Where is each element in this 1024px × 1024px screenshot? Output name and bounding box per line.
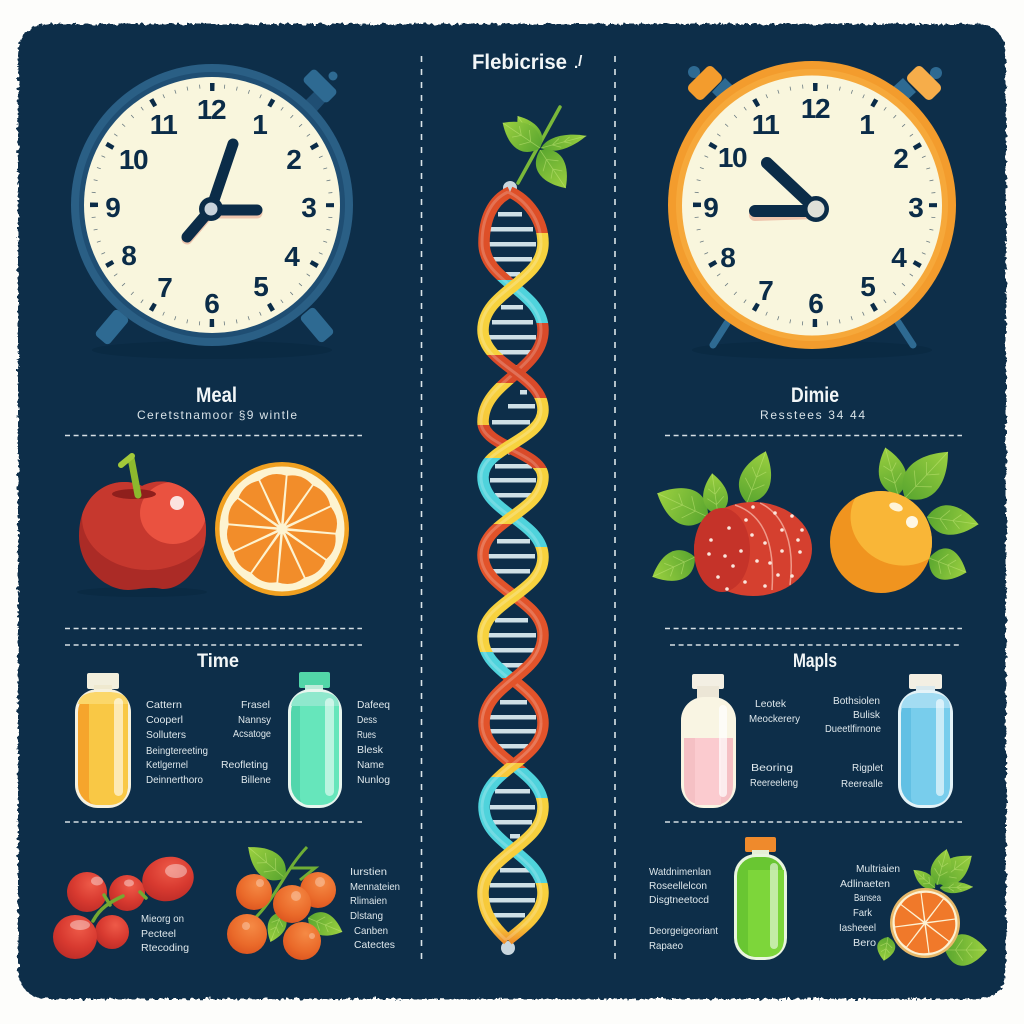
left clock feet [94,306,335,346]
column dividers [422,56,615,964]
text: green bottle left labels: Disgtneetocd [649,894,709,906]
text: mint bottle labels: Nunlog [357,774,390,786]
text: middle labels: Frasel [241,699,270,711]
center title: / [578,53,583,70]
right clock bells [686,64,943,102]
text: mint bottle labels: Blesk [357,744,384,756]
icon: orange slice [215,462,349,596]
icon: strawberry with leaves [646,446,812,596]
dna helix [481,107,588,955]
left clock numerals: 4 [284,241,300,272]
text: yellow bottle labels: Cattern [146,699,182,711]
text: mint bottle labels: Rues [357,729,376,741]
text: pink bottle labels [749,698,801,789]
text: orange slice labels: Adlinaeten [840,878,890,890]
text: tomato labels: Rlimaien [350,895,387,907]
text: middle labels: Nannsy [238,714,272,726]
right clock numerals: 6 [808,288,824,319]
text: yellow bottle labels: Solluters [146,729,186,741]
heading: Maps: Mapls [793,651,837,672]
right clock numerals: 7 [758,275,774,306]
text: yellow bottle labels: Ketlgernel [146,759,188,771]
right clock numerals: 11 [752,109,779,140]
text: cherry labels: Rtecoding [141,942,189,954]
dna rungs [487,212,536,918]
left clock numerals: 6 [204,288,220,319]
center title: Flebicrise [472,51,567,74]
text: tomato labels: Dlstang [350,910,383,922]
right clock numerals: 2 [893,143,909,174]
right clock numerals: 3 [908,192,924,223]
left clock hands [187,144,257,239]
text: orange slice labels: Fark [853,907,873,919]
text: yellow bottle labels: Cooperl [146,714,183,726]
heading: Meal: Ceretstnamoor §9 wintle [137,408,297,422]
text: tomato labels [350,866,400,951]
text: orange slice labels [839,863,900,949]
text: blue bottle labels: Rigplet [852,762,883,774]
section dividers [65,436,962,822]
left clock numerals: 5 [253,271,269,302]
dna end caps [501,181,517,955]
text: middle labels: Acsatoge [233,728,271,740]
bottle: yellow [75,673,131,808]
right clock rim [668,61,956,349]
text: tomato labels: Iurstien [350,866,387,878]
left clock bell [302,68,338,111]
left clock [71,64,353,359]
left clock numerals: 3 [301,192,317,223]
right clock numerals: 5 [860,271,876,302]
heading: Dimie [760,384,865,422]
left clock numerals [105,94,317,319]
right clock numerals: 8 [720,242,736,273]
icon: orange with leaves [830,440,981,593]
text: mint bottle labels: Name [357,759,384,771]
left clock numerals: 1 [252,109,268,140]
icon: leaf sprig [495,107,588,196]
text: pink bottle labels: Meockerery [749,713,801,725]
heading: Dimie: Dimie [791,384,839,407]
text: blue bottle labels [825,695,883,790]
text: green bottle left labels: Rapaeo [649,940,683,952]
text: green bottle left labels: Deorgeigeoriant [649,925,718,937]
text: green bottle left labels [649,866,718,952]
heading: Meal: Meal [196,384,237,407]
text: pink bottle labels: Leotek [755,698,787,710]
text: mint bottle labels: Dafeeq [357,699,390,711]
dna back strands [481,192,543,940]
text: orange slice labels: Bansea [854,892,881,904]
left clock numerals: 8 [121,240,137,271]
text: orange slice labels: Iasheeel [839,922,876,934]
text: tomato labels: Canben [354,925,388,937]
text: cherry labels: Pecteel [141,928,176,940]
left clock numerals: 7 [157,272,173,303]
text: middle labels: Billene [241,774,271,786]
text: mint bottle labels: Dess [357,714,377,726]
text: orange slice labels: Multriaien [856,863,900,875]
right clock numerals: 12 [801,93,830,124]
right clock feet [713,322,913,345]
left clock rim [71,64,353,346]
text: blue bottle labels: Bulisk [853,709,881,721]
right clock numerals: 4 [891,242,907,273]
text: yellow bottle labels: Deinnerthoro [146,774,203,786]
text: yellow bottle labels [146,699,208,786]
text: blue bottle labels: Dueetlfirnone [825,723,881,735]
icon: small orange slice with leaves [875,846,987,966]
icon: cherries [53,851,199,959]
text: green bottle left labels: Watdnimenlan [649,866,711,878]
text: cherry labels: Mieorg on [141,913,184,925]
bottle: blue [898,674,953,808]
right clock hands [755,163,829,222]
text: blue bottle labels: Bothsiolen [833,695,880,707]
icon: tomatoes on vine [227,837,347,960]
text: cherry labels [141,913,189,954]
text: tomato labels: Catectes [354,939,395,951]
right clock numerals: 10 [718,142,747,173]
right clock numerals [703,93,924,319]
text: green bottle left labels: Roseellelcon [649,880,707,892]
left clock numerals: 11 [150,109,177,140]
heading: Meal [137,384,297,422]
left clock numerals: 9 [105,192,121,223]
text: pink bottle labels: Beoring [751,762,793,774]
text: yellow bottle labels: Beingtereeting [146,745,208,757]
dna front strands [481,243,543,893]
left clock numerals: 10 [119,144,148,175]
heading: Dimie: Resstees 34 44 [760,408,865,422]
text: mint bottle labels [357,699,390,786]
bottle: pink [681,674,736,808]
text: orange slice labels: Bero [853,937,876,949]
heading: Time: Time [197,651,239,672]
right clock numerals: 1 [859,109,875,140]
left clock face [84,77,340,333]
text: middle labels: Reofleting [221,759,268,771]
right clock [668,61,956,359]
text: tomato labels: Mennateien [350,881,400,893]
text: pink bottle labels: Reereeleng [750,777,798,789]
right clock face [682,76,942,336]
left clock numerals: 2 [286,144,302,175]
text: blue bottle labels: Reerealle [841,778,883,790]
right clock numerals: 9 [703,192,719,223]
left clock numerals: 12 [197,94,226,125]
bottle: green [734,837,787,960]
bottle: mint [288,672,342,808]
center title: . [574,55,578,72]
text: middle labels [221,699,272,786]
icon: apple [79,453,206,590]
